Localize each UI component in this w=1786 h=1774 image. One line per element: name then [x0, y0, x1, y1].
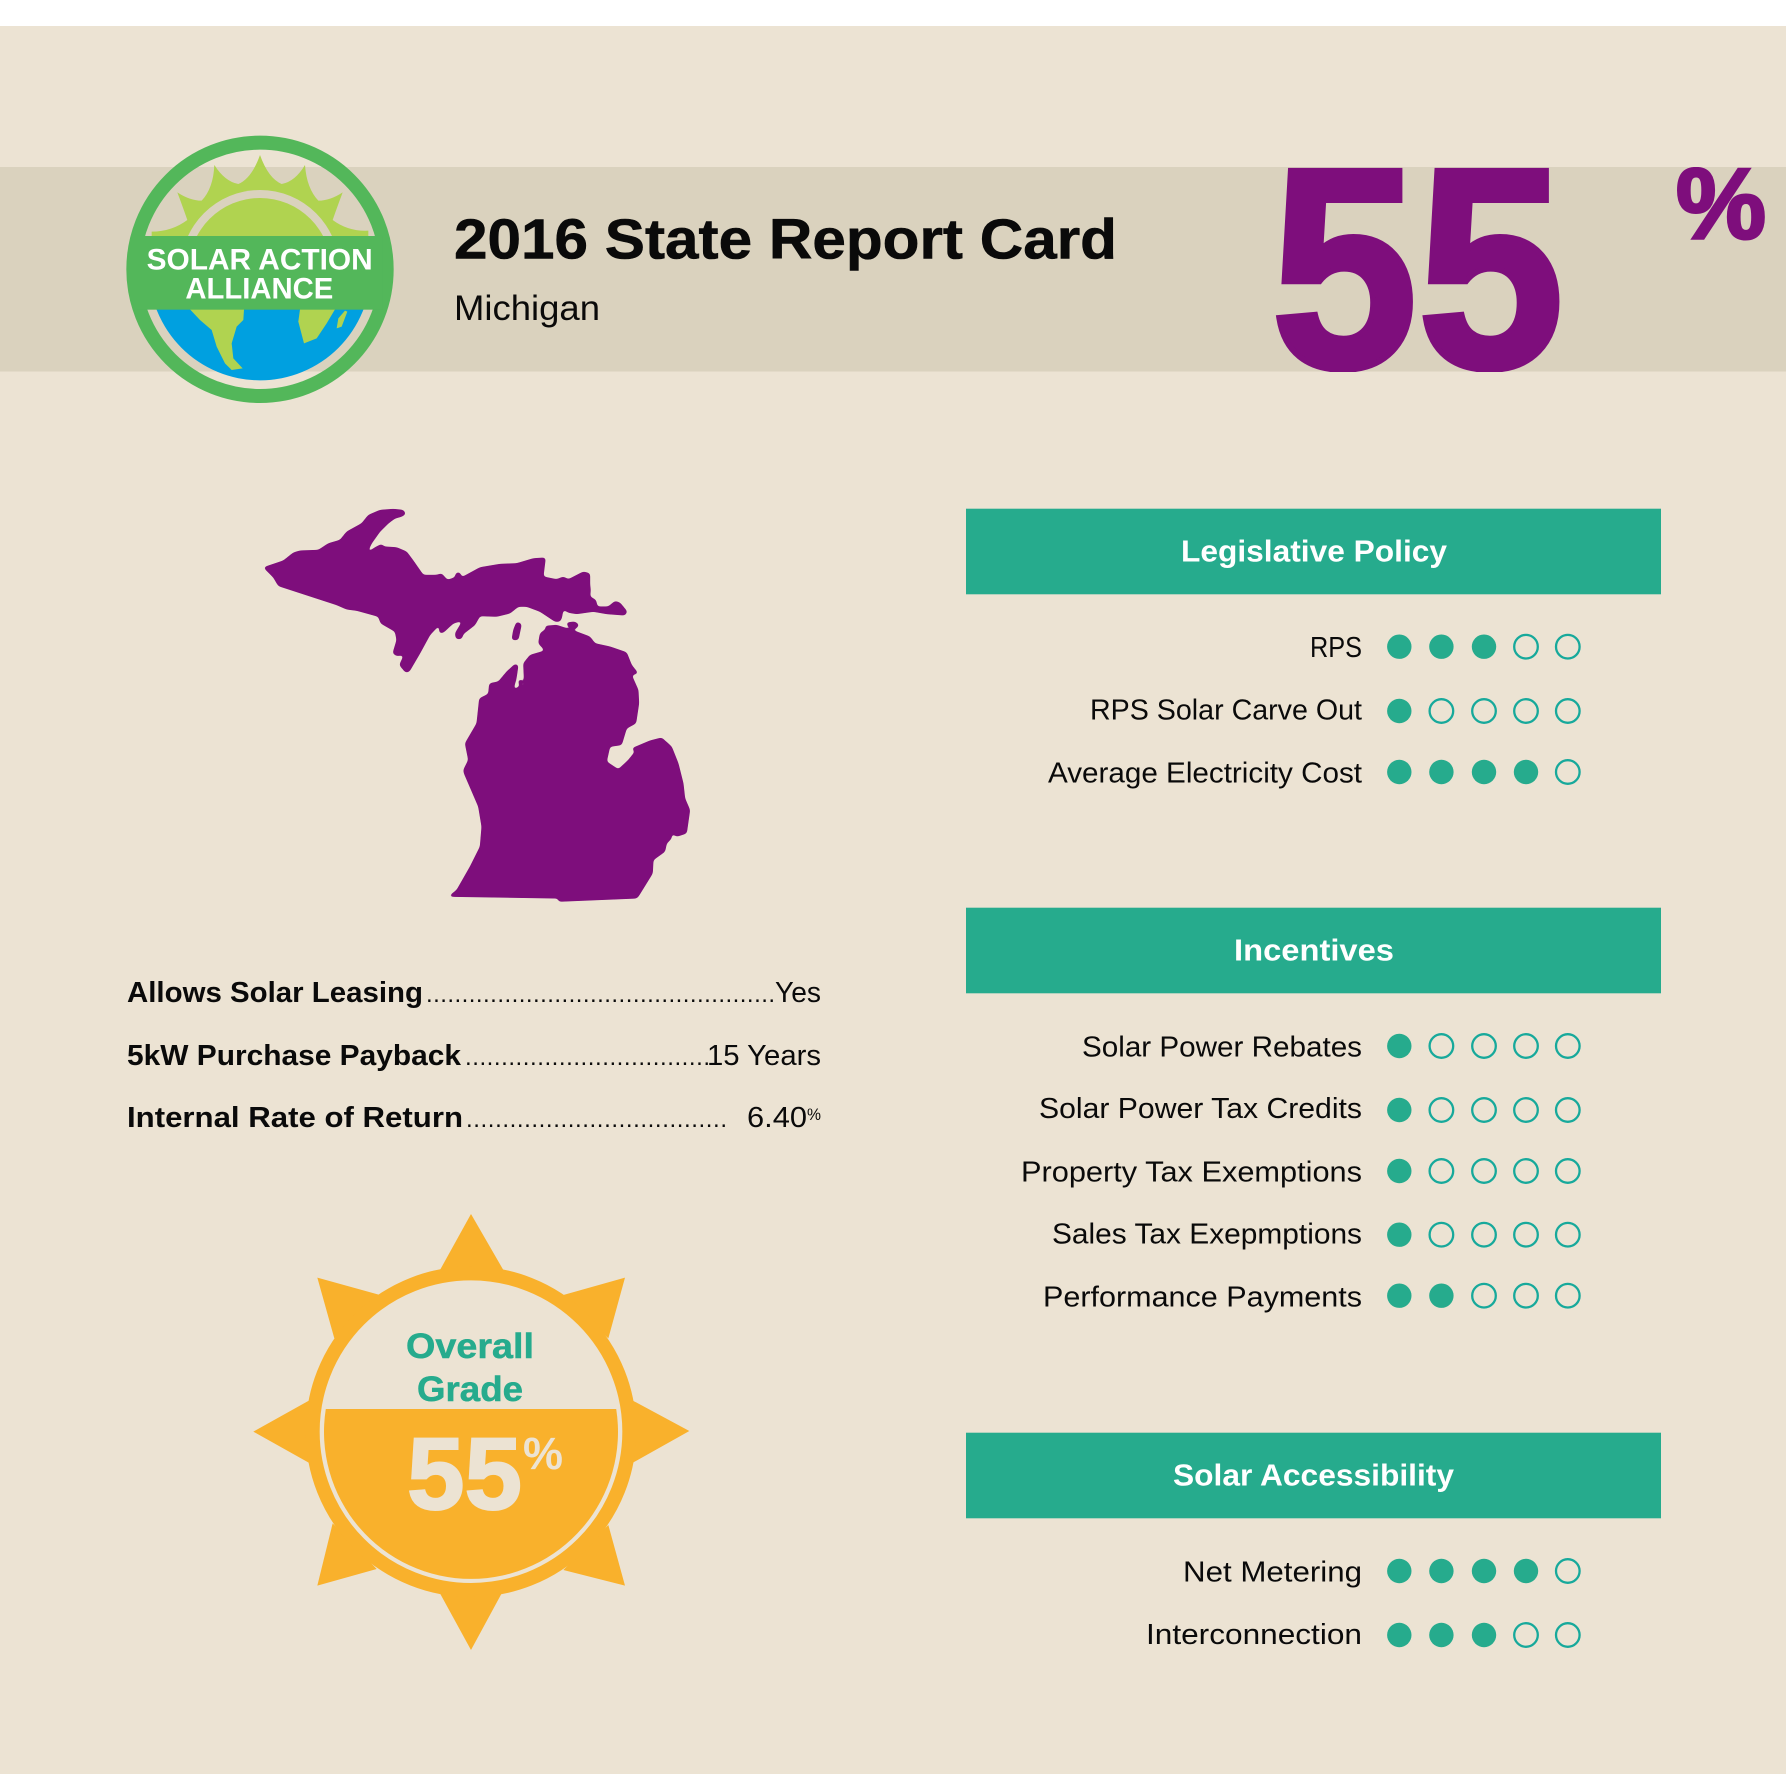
- headline score 55%: [1276, 167, 1765, 372]
- icon: sun rays and ring: [253, 1214, 689, 1650]
- row: Solar Power Tax Credits: [1039, 1093, 1580, 1125]
- gauge fill: [324, 1409, 618, 1579]
- heading: Legislative Policy: [966, 509, 1661, 594]
- stat: internal rate of return: %: [807, 1105, 821, 1124]
- badge score: 55: [407, 1417, 522, 1531]
- row: Performance Payments: Performance Payments: [1043, 1282, 1362, 1314]
- row: Property Tax Exemptions: [1021, 1156, 1580, 1188]
- heading: Solar Accessibility: Solar Accessibility: [1173, 1458, 1455, 1492]
- headline score 55%: %: [1676, 148, 1766, 260]
- row: RPS Solar Carve Out: RPS Solar Carve Out: [1090, 694, 1362, 726]
- headline score 55%: 55: [1271, 110, 1564, 428]
- heading: Legislative Policy: Legislative Policy: [1181, 534, 1448, 568]
- row: Average Electricity Cost: Average Electricity Cost: [1048, 758, 1362, 790]
- row: Net Metering: [1183, 1556, 1580, 1588]
- stat: solar leasing: .................................................: [426, 981, 775, 1008]
- stats list: [127, 977, 821, 1134]
- stat: internal rate of return: Internal Rate of Return: [127, 1102, 463, 1134]
- row: Interconnection: [1146, 1619, 1580, 1651]
- stat: solar leasing: [127, 977, 821, 1009]
- stat: internal rate of return: 6.40: [747, 1102, 807, 1134]
- row: RPS Solar Carve Out: [1090, 694, 1580, 726]
- stat: solar leasing: Allows Solar Leasing: [127, 977, 423, 1009]
- heading: Incentives: [966, 908, 1661, 993]
- panel: Solar Accessibility: [966, 1433, 1661, 1651]
- stat: purchase payback: ..................................: [465, 1044, 710, 1071]
- row: Sales Tax Exepmptions: [1052, 1218, 1580, 1250]
- header band: [0, 167, 1786, 372]
- row: Solar Power Rebates: Solar Power Rebates: [1082, 1032, 1362, 1064]
- subtitle: state name: Michigan: [454, 289, 600, 328]
- stat: purchase payback: [127, 1040, 821, 1072]
- badge: overall grade sun: Grade: [417, 1370, 523, 1409]
- row: Average Electricity Cost: [1048, 758, 1580, 790]
- stat: solar leasing: Yes: [775, 977, 821, 1009]
- heading: Incentives: Incentives: [1234, 932, 1394, 968]
- row: RPS: [1310, 632, 1580, 664]
- row: Interconnection: Interconnection: [1146, 1619, 1362, 1651]
- icon: Solar Action Alliance logo: [133, 143, 387, 396]
- stat: purchase payback: 15 Years: [707, 1040, 821, 1072]
- icon: Solar Action Alliance logo: ALLIANCE: [185, 272, 333, 305]
- stat: internal rate of return: [127, 1102, 821, 1134]
- title: 2016 State Report Card: [454, 208, 1117, 272]
- row: Sales Tax Exepmptions: Sales Tax Exepmptions: [1052, 1218, 1362, 1250]
- stat: internal rate of return: ....................................: [466, 1106, 727, 1133]
- row: Solar Power Rebates: [1082, 1032, 1580, 1064]
- stat: purchase payback: 5kW Purchase Payback: [127, 1040, 462, 1072]
- badge: overall grade sun: %: [523, 1428, 563, 1479]
- badge label: Overall: [406, 1327, 534, 1366]
- heading: Solar Accessibility: [966, 1433, 1661, 1518]
- panel: Incentives: [966, 908, 1661, 1314]
- row: Performance Payments: [1043, 1282, 1580, 1314]
- icon: Solar Action Alliance logo: SOLAR ACTION: [147, 243, 373, 276]
- badge: overall grade sun: [253, 1214, 689, 1650]
- row: Property Tax Exemptions: Property Tax Exemptions: [1021, 1156, 1362, 1188]
- row: RPS: RPS: [1310, 632, 1362, 664]
- map: Michigan: [263, 509, 690, 902]
- panel: Legislative Policy: [966, 509, 1661, 790]
- row: Net Metering: Net Metering: [1183, 1556, 1362, 1588]
- row: Solar Power Tax Credits: Solar Power Tax Credits: [1039, 1093, 1362, 1125]
